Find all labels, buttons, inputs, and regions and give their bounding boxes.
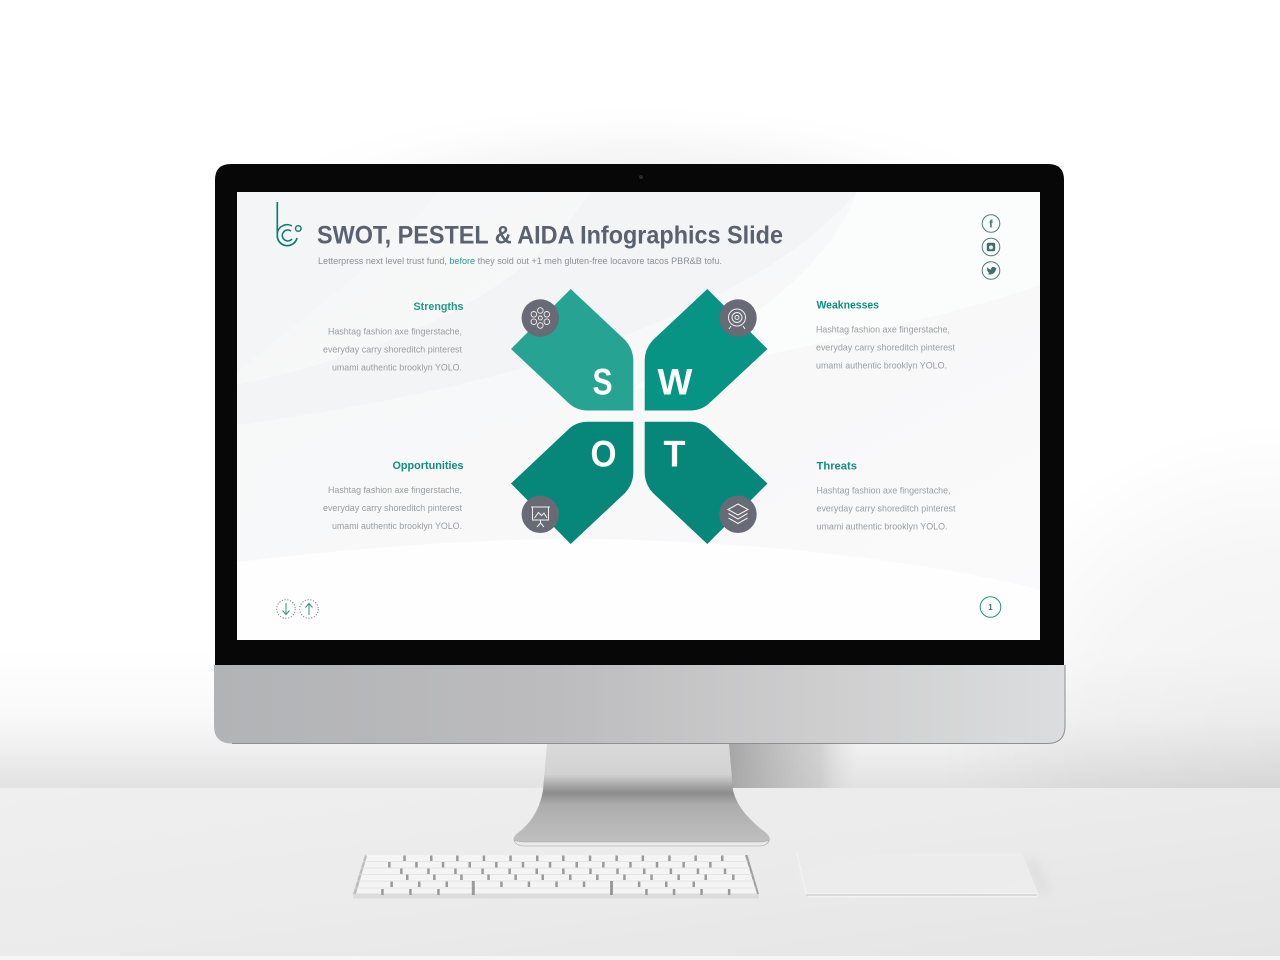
page number (980, 597, 1001, 617)
text block: opportunities description (323, 485, 462, 532)
icon: arrow down (277, 600, 295, 618)
social icons (982, 215, 1000, 279)
panel: threats text (816, 460, 956, 532)
text block: strengths description: Hashtag fashion axe fingerstache, (328, 326, 462, 338)
panel: weaknesses text (816, 300, 955, 372)
icon: arrow up (300, 600, 318, 618)
petal: W: W (658, 362, 693, 402)
text block: threats description (816, 486, 956, 532)
text block: threats description: Hashtag fashion axe fingerstache, (816, 486, 950, 496)
icon: presentation board (522, 496, 559, 533)
icon: layers (719, 496, 757, 533)
title: SWOT, PESTEL & AIDA Infographics Slide (317, 222, 783, 250)
text block: weaknesses description (816, 324, 955, 372)
icon: atom (522, 299, 559, 337)
monitor stand (514, 744, 859, 846)
trackpad (797, 853, 1052, 898)
slide screen (237, 192, 1040, 640)
icon: twitter (982, 262, 1000, 279)
heading: Strengths: Strengths (414, 301, 464, 313)
logo (277, 202, 301, 246)
SWOT diagram (511, 289, 768, 544)
text block: weaknesses description: umami authentic brooklyn YOLO. (816, 360, 947, 372)
text block: strengths description: umami authentic brooklyn YOLO. (332, 362, 462, 374)
petal: S (511, 289, 633, 410)
heading: Threats: Threats (816, 460, 857, 472)
navigation arrows (277, 600, 318, 618)
text block: opportunities description: Hashtag fashion axe fingerstache, (328, 485, 462, 496)
petal: W (645, 289, 768, 410)
heading: Weaknesses: Weaknesses (816, 300, 879, 312)
petal: T (645, 422, 768, 544)
webcam (639, 175, 643, 179)
icon: instagram (982, 238, 1000, 256)
petal: O: O (590, 434, 616, 474)
text block: weaknesses description: Hashtag fashion axe fingerstache, (816, 324, 950, 336)
page number: 1 (988, 603, 993, 612)
text block: threats description: everyday carry shoreditch pinterest (816, 504, 956, 514)
monitor bezel (215, 164, 1064, 665)
petal: S: S (592, 362, 612, 402)
heading: Opportunities: Opportunities (392, 460, 464, 472)
text block: threats description: umami authentic brooklyn YOLO. (816, 522, 948, 532)
keyboard key gaps (381, 856, 734, 895)
keyboard (353, 855, 759, 898)
subtitle: Letterpress next level trust fund, before they sold out +1 meh gluten-free locavore tacos PBR&B tofu. (318, 256, 722, 267)
panel: strengths text (323, 301, 464, 374)
text block: weaknesses description: everyday carry shoreditch pinterest (816, 342, 955, 354)
icon: target (719, 299, 757, 337)
text block: strengths description: everyday carry shoreditch pinterest (323, 344, 462, 356)
petal: O (511, 422, 633, 544)
text block: opportunities description: everyday carry shoreditch pinterest (323, 503, 462, 514)
text block: strengths description (323, 326, 462, 374)
text block: opportunities description: umami authentic brooklyn YOLO. (332, 521, 462, 532)
petal: T: T (664, 434, 686, 474)
icon: facebook: f (989, 218, 993, 230)
panel: opportunities text (323, 460, 464, 532)
monitor chin (214, 665, 1065, 744)
monitor body (214, 164, 1065, 744)
decorative swooshes (237, 192, 1040, 640)
